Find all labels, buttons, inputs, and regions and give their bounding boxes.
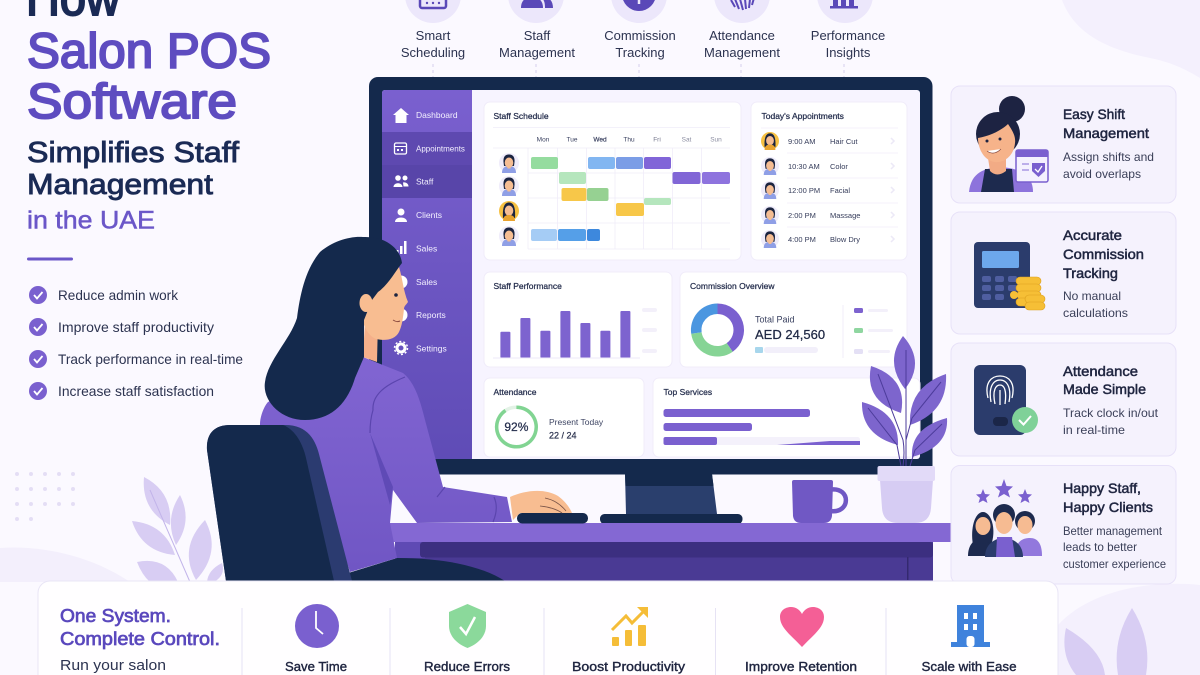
- title: Simplifies Staff: [27, 137, 240, 169]
- today's appointments panel: Hair Cut: [830, 137, 858, 146]
- decorative dots: [15, 472, 75, 521]
- plant pot: [878, 466, 935, 523]
- today's appointments panel: 12:00 PM: [788, 186, 820, 195]
- today's appointments panel: Facial: [830, 186, 850, 195]
- feature: staff management: Staff: [524, 28, 551, 43]
- donut chart: [696, 309, 739, 351]
- scale with ease: [922, 605, 1016, 674]
- feature: performance insights: Insights: [826, 45, 871, 60]
- benefit card: accurate commission tracking: No manual: [1063, 289, 1121, 303]
- title: Software: [27, 75, 237, 129]
- staff schedule panel: Mon: [537, 136, 550, 144]
- scale with ease: Scale with Ease: [922, 659, 1016, 674]
- today's appointments panel: Color: [830, 162, 848, 171]
- sidebar: [382, 90, 472, 459]
- attendance panel: Present Today: [549, 417, 604, 427]
- attendance panel: Attendance: [494, 387, 537, 397]
- commission overview panel: [680, 272, 907, 367]
- neck: [363, 320, 378, 362]
- desk plant: [862, 336, 947, 523]
- feature: commission tracking: [604, 0, 676, 77]
- benefit card: happy staff, happy clients: leads to better: [1063, 540, 1137, 554]
- face: [360, 265, 408, 340]
- sidebar: Clients: [416, 210, 442, 220]
- benefits checklist: Improve staff productivity: [58, 319, 214, 335]
- desk: [385, 523, 951, 580]
- coffee mug: [792, 480, 846, 523]
- bottom-right plant: [1064, 608, 1147, 675]
- feature: staff management: Management: [499, 45, 575, 60]
- benefits checklist: Increase staff satisfaction: [58, 383, 214, 399]
- today's appointments panel: 4:00 PM: [788, 235, 816, 244]
- bottom summary bar: [38, 581, 1058, 675]
- ear: [360, 294, 372, 312]
- today's appointments panel: Massage: [830, 211, 860, 220]
- benefit card: happy staff, happy clients: [951, 466, 1176, 584]
- benefit card: attendance made simple: in real-time: [1063, 423, 1125, 437]
- sweater: [260, 357, 512, 572]
- feature: performance insights: [811, 0, 885, 77]
- improve retention: Improve Retention: [745, 659, 857, 674]
- screen: [382, 90, 920, 459]
- feature: smart scheduling: [401, 0, 465, 77]
- monitor frame: [369, 77, 932, 474]
- one system callout: Complete Control.: [60, 629, 220, 649]
- staff schedule panel: Sat: [682, 136, 692, 144]
- monitor: [369, 77, 932, 524]
- benefit card: happy staff, happy clients: Happy Clients: [1063, 499, 1153, 515]
- save time: [285, 604, 347, 674]
- feature: smart scheduling: Smart: [416, 28, 451, 43]
- title: [26, 0, 271, 234]
- icon: woman with calendar: [969, 96, 1048, 192]
- boost productivity: Boost Productivity: [572, 659, 686, 674]
- benefit card: easy shift management: Easy Shift: [1063, 106, 1125, 122]
- attendance panel: 22 / 24: [549, 430, 577, 440]
- attendance ring: 92%: [504, 420, 529, 434]
- benefit card: happy staff, happy clients: Happy Staff,: [1063, 480, 1141, 496]
- today's appointments panel: Blow Dry: [830, 235, 860, 244]
- keyboard and mouse: [517, 513, 588, 524]
- feature: attendance management: [704, 0, 780, 77]
- attendance panel: [484, 378, 644, 457]
- hand: [510, 491, 572, 520]
- title: in the UAE: [27, 206, 155, 234]
- icon: fingerprint device: [974, 365, 1038, 435]
- title: Salon POS: [27, 24, 271, 78]
- reduce errors: Reduce Errors: [424, 659, 511, 674]
- benefits checklist: Reduce admin work: [58, 287, 179, 303]
- benefit card: accurate commission tracking: Accurate: [1063, 227, 1122, 243]
- commission overview panel: Commission Overview: [690, 281, 775, 291]
- commission overview panel: Total Paid: [755, 314, 795, 324]
- divider: [27, 258, 73, 260]
- icon: team with stars: [968, 479, 1042, 557]
- benefit card: easy shift management: [951, 86, 1176, 203]
- sidebar: Reports: [416, 310, 446, 320]
- benefit card: attendance made simple: Track clock in/out: [1063, 406, 1159, 420]
- today's appointments panel: Today's Appointments: [762, 111, 844, 121]
- sidebar: Staff: [416, 176, 434, 186]
- monitor stand: [600, 474, 742, 524]
- benefit card: accurate commission tracking: calculations: [1063, 306, 1128, 320]
- staff performance chart: [484, 272, 672, 367]
- top services panel: [653, 378, 920, 457]
- benefit card: accurate commission tracking: [951, 212, 1176, 334]
- benefit card: attendance made simple: [951, 343, 1176, 456]
- benefit card: easy shift management: avoid overlaps: [1063, 167, 1141, 181]
- commission overview panel: AED 24,560: [755, 327, 825, 342]
- feature: attendance management: Management: [704, 45, 780, 60]
- one system callout: Run your salon: [60, 657, 166, 674]
- benefit card: easy shift management: Management: [1063, 125, 1149, 141]
- today's appointments panel: 10:30 AM: [788, 162, 820, 171]
- benefit card: happy staff, happy clients: Better management: [1063, 524, 1163, 538]
- feature: smart scheduling: Scheduling: [401, 45, 465, 60]
- bottom-left plant: [132, 477, 223, 582]
- feature: commission tracking: Commission: [604, 28, 676, 43]
- staff schedule panel: Fri: [653, 136, 661, 144]
- feature: staff management: [499, 0, 575, 77]
- staff schedule panel: [484, 102, 741, 260]
- today's appointments panel: 9:00 AM: [788, 137, 816, 146]
- sidebar: Dashboard: [416, 110, 458, 120]
- sidebar: Appointments: [416, 144, 465, 154]
- one system callout: [60, 606, 220, 674]
- sidebar: Sales: [416, 277, 437, 287]
- staff schedule panel: Wed: [593, 136, 607, 144]
- save time: Save Time: [285, 659, 347, 674]
- today's appointments panel: [751, 102, 907, 260]
- staff schedule panel: Sun: [710, 136, 722, 144]
- staff schedule panel: Tue: [567, 136, 578, 144]
- benefits checklist: Track performance in real-time: [58, 351, 243, 367]
- benefits checklist: [29, 286, 243, 400]
- chair front: [207, 425, 334, 581]
- woman at desk: [207, 237, 572, 581]
- feature: commission tracking: Tracking: [615, 45, 665, 60]
- feature: performance insights: Performance: [811, 28, 885, 43]
- attendance ring: [497, 407, 536, 447]
- benefit card: easy shift management: Assign shifts and: [1063, 150, 1154, 164]
- boost productivity: [572, 607, 686, 674]
- icon: calculator and coins: [974, 242, 1045, 310]
- today's appointments panel: 2:00 PM: [788, 211, 816, 220]
- chair back: [207, 425, 352, 581]
- one system callout: One System.: [60, 606, 171, 626]
- staff performance chart: Staff Performance: [494, 281, 562, 291]
- top feature row: [401, 0, 885, 77]
- improve retention: [745, 607, 857, 674]
- sidebar: Sales: [416, 244, 437, 254]
- reduce errors: [424, 604, 511, 674]
- benefit card: accurate commission tracking: Commission: [1063, 246, 1144, 262]
- top services panel: Top Services: [664, 387, 712, 397]
- title: Management: [27, 169, 213, 201]
- sidebar: Settings: [416, 344, 447, 354]
- woman's trousers: [345, 558, 505, 581]
- staff schedule panel: Thu: [623, 136, 635, 144]
- benefit card: accurate commission tracking: Tracking: [1063, 265, 1118, 281]
- staff schedule panel: Staff Schedule: [494, 111, 549, 121]
- feature: attendance management: Attendance: [709, 28, 775, 43]
- benefit card: attendance made simple: Attendance: [1063, 363, 1138, 379]
- benefit card: happy staff, happy clients: customer experience: [1063, 557, 1166, 571]
- benefit card: attendance made simple: Made Simple: [1063, 381, 1146, 397]
- hair: [265, 237, 402, 420]
